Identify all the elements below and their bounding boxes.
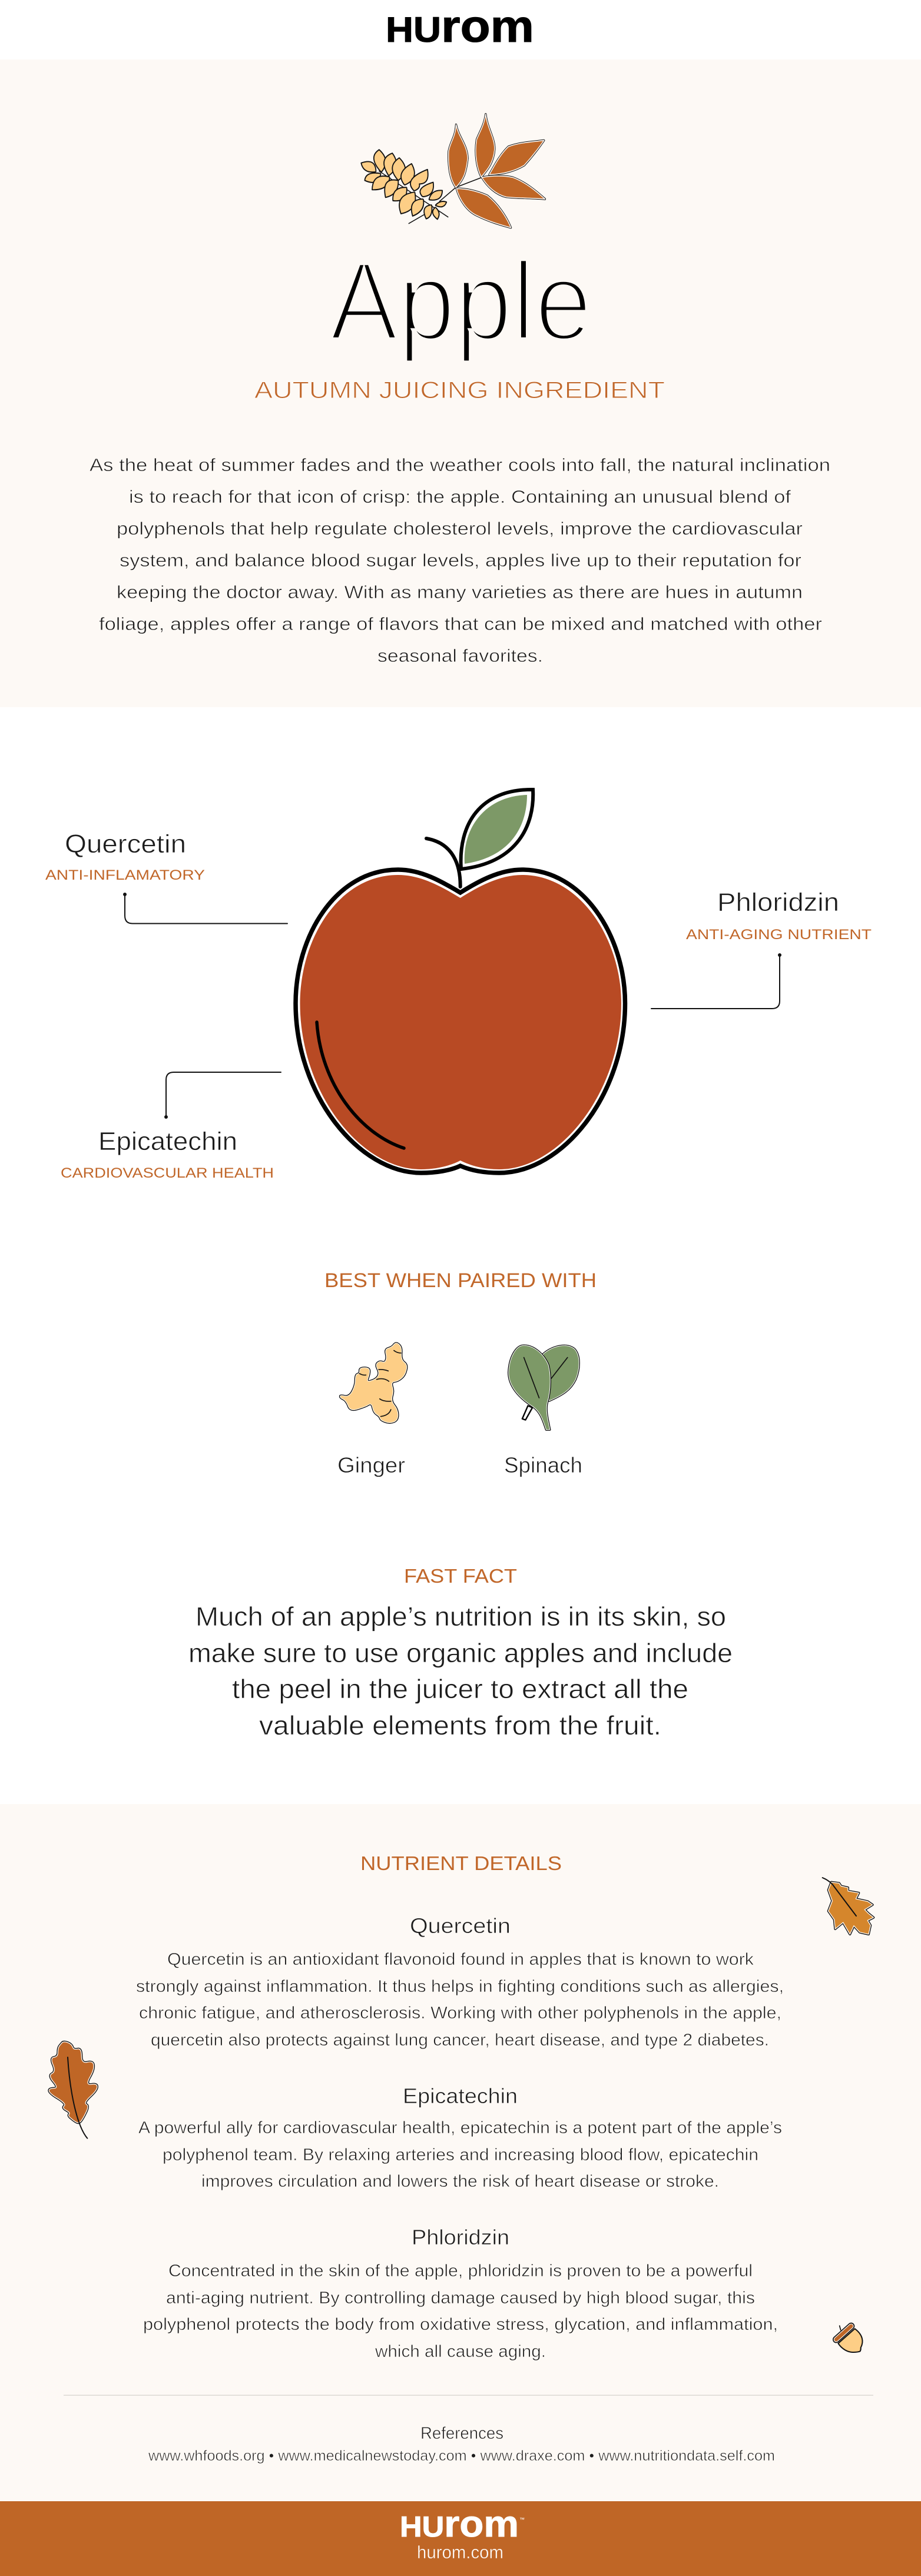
intro text block: foliage, apples offer a range of flavors that can be mixed and matched with other: [99, 614, 822, 634]
callout: epicatechin: [61, 1072, 281, 1181]
phloridzin details: Concentrated in the skin of the apple, phloridzin is proven to be a powerful: [168, 2262, 753, 2280]
icon: oak leaf: [49, 2042, 97, 2139]
intro text block: system, and balance blood sugar levels, apples live up to their reputation for: [120, 550, 801, 571]
intro text block: keeping the doctor away. With as many varieties as there are hues in autumn: [117, 582, 803, 602]
phloridzin details: Phloridzin: [412, 2225, 509, 2249]
phloridzin details: anti-aging nutrient. By controlling damage caused by high blood sugar, this: [166, 2289, 755, 2308]
callout: quercetin: Quercetin: [65, 830, 186, 858]
fast fact text: make sure to use organic apples and include: [188, 1638, 733, 1668]
callout: epicatechin: Epicatechin: [98, 1127, 237, 1156]
fast fact text: Much of an apple’s nutrition is in its skin, so: [196, 1602, 726, 1632]
epicatechin details: A powerful ally for cardiovascular health, epicatechin is a potent part of the apple’s: [138, 2119, 782, 2137]
header logo: HUrom: [386, 1, 534, 52]
quercetin details: chronic fatigue, and atherosclerosis. Working with other polyphenols in the apple,: [139, 2004, 781, 2023]
epicatechin details: polyphenol team. By relaxing arteries and increasing blood flow, epicatechin: [163, 2146, 758, 2164]
title: Apple: [330, 239, 592, 364]
intro text block: As the heat of summer fades and the weather cools into fall, the natural inclination: [90, 455, 830, 475]
quercetin details: strongly against inflammation. It thus helps in fighting conditions such as allergies,: [136, 1977, 784, 1996]
heading: nutrient details: NUTRIENT DETAILS: [360, 1852, 562, 1874]
fast fact text: the peel in the juicer to extract all the: [232, 1674, 688, 1704]
icon: acorn: [836, 2326, 863, 2352]
apple illustration: [296, 790, 625, 1173]
icon: spinach: [509, 1345, 579, 1430]
footer logo: HUrom: [400, 2504, 519, 2545]
panel: footer: [0, 2501, 921, 2576]
references: www.whfoods.org • www.medicalnewstoday.com • www.draxe.com • www.nutritiondata.self.com: [148, 2448, 775, 2464]
panel: intro: [0, 59, 921, 707]
icon: ginger: [340, 1343, 407, 1423]
subtitle: AUTUMN JUICING INGREDIENT: [254, 377, 665, 403]
callout: quercetin: ANTI-INFLAMATORY: [45, 867, 205, 883]
heading: best when paired with: BEST WHEN PAIRED WITH: [324, 1269, 597, 1292]
intro text block: seasonal favorites.: [377, 645, 543, 666]
label: spinach: Spinach: [504, 1453, 582, 1477]
callout: phloridzin: ANTI-AGING NUTRIENT: [686, 927, 872, 943]
label: ginger: Ginger: [337, 1453, 405, 1477]
phloridzin details: polyphenol protects the body from oxidative stress, glycation, and inflammation,: [143, 2315, 778, 2334]
heading: fast fact: FAST FACT: [404, 1565, 517, 1587]
quercetin details: Quercetin is an antioxidant flavonoid found in apples that is known to work: [167, 1950, 754, 1969]
intro text block: is to reach for that icon of crisp: the apple. Containing an unusual blend of: [129, 486, 791, 507]
intro text block: polyphenols that help regulate cholesterol levels, improve the cardiovascular: [117, 518, 803, 539]
fast fact text: [188, 1602, 733, 1740]
epicatechin details: [138, 2084, 782, 2191]
intro text block: [90, 455, 830, 666]
epicatechin details: Epicatechin: [403, 2084, 518, 2108]
website: hurom.com: [417, 2542, 503, 2562]
callout: phloridzin: Phloridzin: [717, 888, 839, 917]
icon: autumn leaves: [361, 114, 545, 228]
quercetin details: Quercetin: [410, 1914, 511, 1938]
phloridzin details: [143, 2225, 778, 2361]
icon: maple leaf: [823, 1878, 873, 1934]
callout: phloridzin: [651, 888, 872, 1009]
phloridzin details: which all cause aging.: [375, 2342, 546, 2361]
quercetin details: quercetin also protects against lung cancer, heart disease, and type 2 diabetes.: [151, 2031, 769, 2050]
fast fact text: valuable elements from the fruit.: [259, 1710, 661, 1740]
references: [148, 2424, 775, 2464]
callout: epicatechin: CARDIOVASCULAR HEALTH: [61, 1165, 274, 1181]
epicatechin details: improves circulation and lowers the risk of heart disease or stroke.: [201, 2172, 719, 2191]
trademark: ™: [519, 2517, 525, 2522]
callout: quercetin: [45, 830, 287, 923]
quercetin details: [136, 1914, 784, 2050]
references: References: [420, 2424, 503, 2443]
panel: nutrient details: [0, 1804, 921, 2501]
